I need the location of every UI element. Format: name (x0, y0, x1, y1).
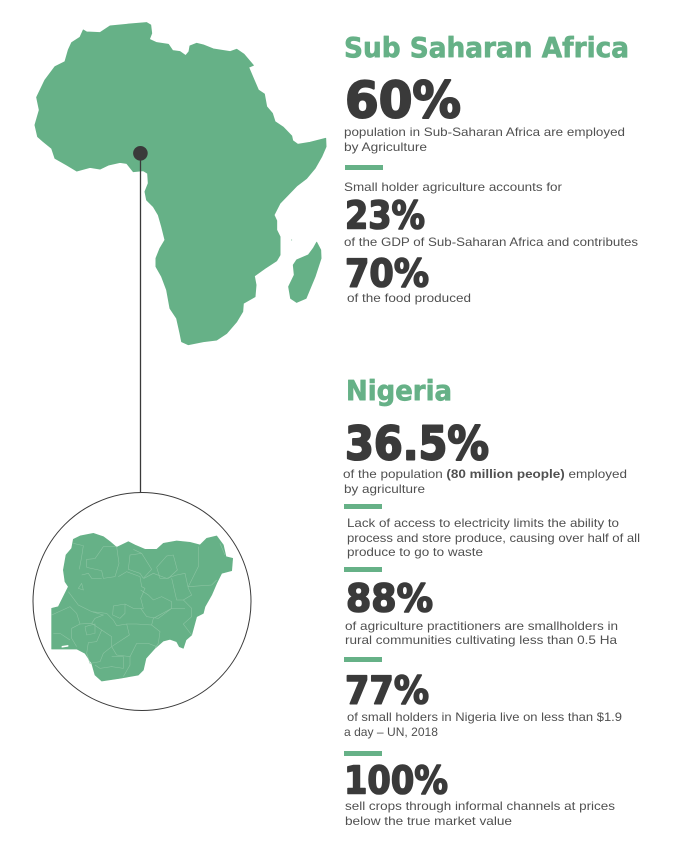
heading: Sub Saharan Africa: Sub Saharan Africa (344, 32, 629, 64)
stat block: 23% (344, 180, 638, 249)
stat block: 77%: a day – UN, 2018 (344, 725, 438, 739)
stat block: 60% (344, 72, 625, 154)
stat block: 23%: of the GDP of Sub-Saharan Africa and contributes (344, 235, 638, 249)
map: Africa (35, 23, 326, 345)
stat block: 60%: 60% (345, 72, 461, 130)
stat block: 36.5%: by agriculture (344, 482, 425, 496)
stat block: 77%: 77% (345, 668, 429, 712)
stat block: 77%: of small holders in Nigeria live on less than $1.9 (347, 710, 622, 724)
text block: electricity access: Lack of access to electricity limits the ability to (347, 516, 619, 530)
text block: electricity access (347, 516, 640, 559)
text block: electricity access: produce to go to waste (347, 545, 483, 559)
stat block: 88%: 88% (346, 576, 433, 620)
stat block: 100%: sell crops through informal channels at prices (345, 799, 615, 813)
stat block: 23%: 23% (345, 194, 425, 238)
text block: electricity access: process and store produce, causing over half of all (347, 531, 640, 545)
stat block: 36.5%: of the population (80 million people) employed (343, 467, 627, 481)
stat block: 36.5% (343, 416, 627, 496)
stat block: 23%: Small holder agriculture accounts for (344, 180, 562, 194)
stat block: 88% (345, 576, 618, 647)
stat block: 60%: population in Sub-Saharan Africa are employed (344, 125, 625, 139)
stat block: 60%: by Agriculture (344, 140, 427, 154)
heading: Nigeria: Nigeria (346, 375, 452, 407)
stat block: 100% (344, 758, 615, 828)
stat block: 36.5%: 36.5% (345, 416, 489, 470)
stat block: 88%: of agriculture practitioners are smallholders in (345, 619, 618, 633)
stat block: 70% (345, 252, 471, 305)
stat block: 70%: of the food produced (347, 291, 471, 305)
connector line from Africa to Nigeria (140, 153, 142, 492)
stat block: 77% (344, 668, 622, 739)
circle around Nigeria map (33, 492, 251, 710)
stat block: 100%: 100% (344, 758, 448, 802)
stat block: 88%: rural communities cultivating less than 0.5 Ha (345, 633, 617, 647)
location marker dot (133, 146, 148, 161)
map: Nigeria (52, 533, 233, 681)
stat block: 70%: 70% (345, 252, 429, 296)
stat block: 100%: below the true market value (345, 814, 512, 828)
